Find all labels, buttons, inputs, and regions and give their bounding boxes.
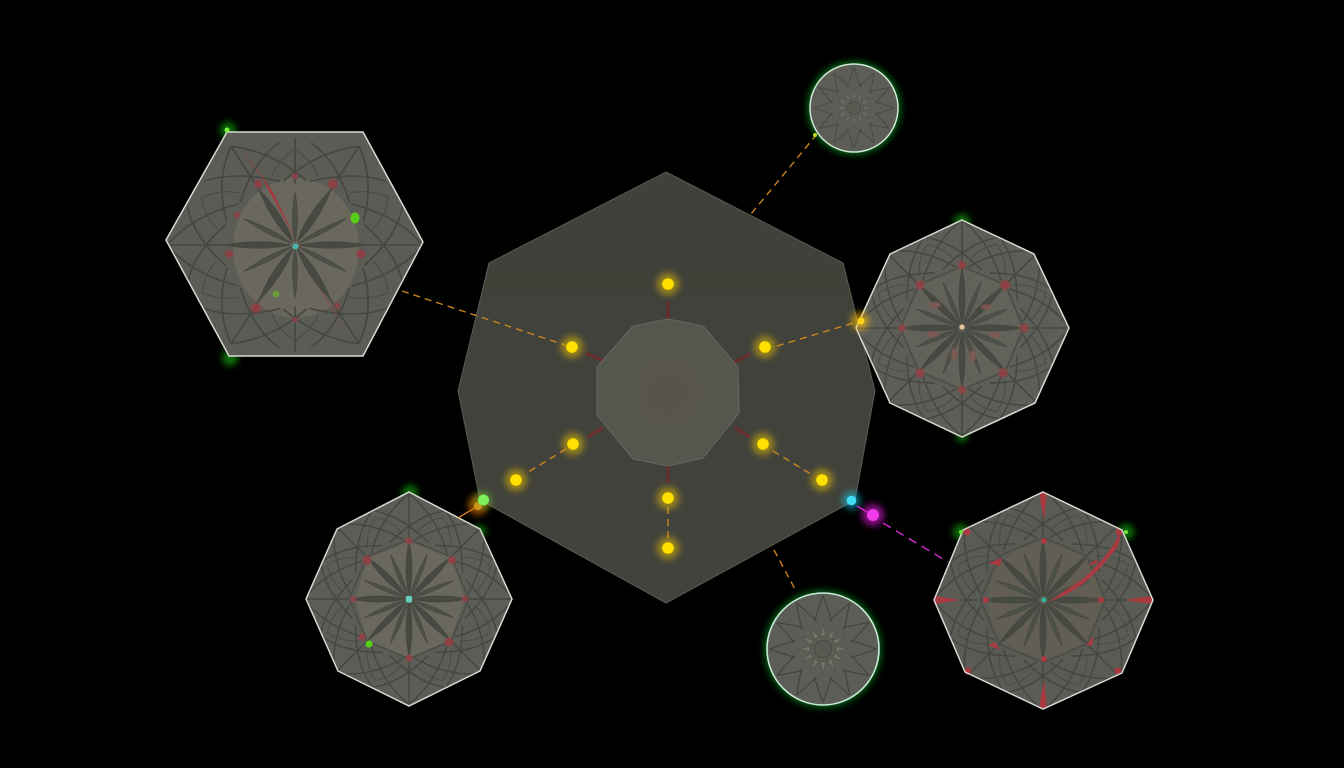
inner textured field	[988, 544, 1100, 656]
octagon outline	[934, 492, 1153, 709]
red accents	[225, 143, 366, 338]
node: magenta	[862, 504, 884, 526]
octagon body	[856, 220, 1069, 437]
markers: teal centre and green dot	[366, 596, 412, 648]
red spokes linking core to nodes	[586, 301, 750, 483]
vertex glows	[220, 122, 238, 366]
red accents	[935, 493, 1152, 708]
yellow connection marker	[851, 312, 869, 330]
connector end marker	[813, 133, 817, 137]
octagon outline	[306, 492, 512, 706]
inner field	[901, 265, 1024, 391]
vertex glows	[402, 485, 486, 537]
panel: octagon mandala (south-east)	[933, 490, 1153, 710]
red accents	[898, 261, 1028, 394]
green glow ring	[807, 61, 901, 155]
connector: magenta dashed link	[857, 506, 948, 562]
panel: south circle	[764, 590, 882, 708]
centre dot	[1042, 598, 1046, 602]
hexagon outline	[166, 132, 423, 356]
inner field	[355, 542, 465, 658]
connector: dashed to south circle	[774, 550, 796, 591]
circle outline	[810, 64, 898, 152]
green glow ring	[764, 590, 882, 708]
hub outer polygon	[458, 172, 875, 603]
vertex glows	[953, 524, 1134, 540]
circle outline	[767, 593, 879, 705]
flower star linework	[814, 68, 894, 148]
circle body	[767, 593, 879, 705]
node: cyan junction	[842, 492, 860, 510]
green edge markers	[959, 530, 1128, 534]
dashed internal connectors	[402, 291, 860, 541]
mandala linework	[933, 490, 1153, 710]
connector: dashed to north circle	[751, 134, 817, 214]
panel: octagon mandala (south-west)	[304, 485, 514, 706]
panel: octagon mandala (east)	[851, 214, 1070, 442]
hub core polygon	[597, 319, 739, 466]
mandala linework	[854, 220, 1070, 436]
red accents	[350, 538, 468, 662]
hexagon body	[166, 132, 423, 356]
mandala linework	[304, 494, 514, 704]
octagon body	[934, 492, 1153, 709]
centre dot	[960, 324, 964, 330]
inner light field	[233, 178, 359, 318]
panel: hexagon mandala (north-west)	[166, 122, 423, 366]
panel: central hub polygon	[402, 172, 875, 603]
infographic canvas	[165, 56, 1154, 712]
node: green junction	[474, 491, 492, 509]
octagon body	[306, 492, 512, 706]
flower star linework	[770, 596, 876, 702]
yellow nodes	[505, 273, 833, 559]
panel: north circle	[807, 61, 901, 155]
vertex glows	[954, 214, 970, 442]
connector: orange link to south-west octagon	[458, 495, 488, 518]
green and teal markers	[224, 128, 360, 298]
mandala linework	[168, 138, 422, 352]
circle body	[810, 64, 898, 152]
octagon outline	[856, 220, 1069, 437]
